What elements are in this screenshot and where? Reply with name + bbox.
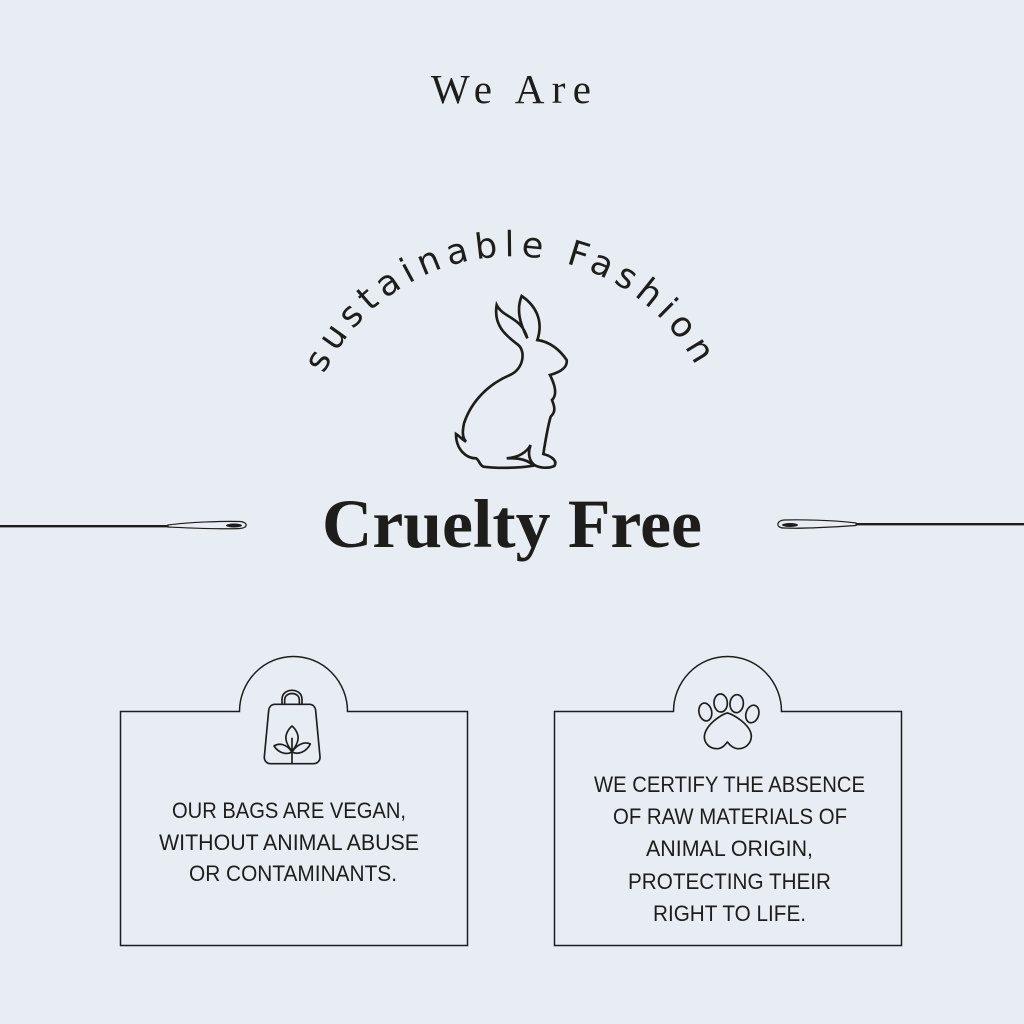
text: no animal materials: RIGHT TO LIFE. <box>653 901 806 926</box>
panel: vegan bags <box>120 656 468 946</box>
needle: left <box>0 521 246 529</box>
text: vegan bags: WITHOUT ANIMAL ABUSE <box>159 830 419 855</box>
icon: shopping bag with leaf <box>264 690 320 764</box>
text: no animal materials: WE CERTIFY THE ABSENCE <box>594 772 865 797</box>
title: Cruelty Free: Cruelty Free <box>322 486 702 562</box>
text: no animal materials: ANIMAL ORIGIN, <box>646 836 813 861</box>
needle: right <box>778 520 1024 528</box>
curved subtitle: sustainable Fashion: sustainable Fashion <box>310 230 709 372</box>
panel: no animal materials <box>554 656 902 946</box>
text: vegan bags: OR CONTAMINANTS. <box>189 861 397 886</box>
text: no animal materials <box>594 772 865 926</box>
icon: paw print <box>697 694 761 749</box>
text: vegan bags <box>159 798 419 886</box>
panel outline with arch <box>554 656 902 946</box>
icon: rabbit <box>456 296 567 468</box>
text: no animal materials: PROTECTING THEIR <box>628 869 831 894</box>
text: vegan bags: OUR BAGS ARE VEGAN, <box>172 798 406 823</box>
heading: We Are: We Are <box>431 66 591 112</box>
text: no animal materials: OF RAW MATERIALS OF <box>613 804 847 829</box>
panel outline with arch <box>120 656 468 946</box>
